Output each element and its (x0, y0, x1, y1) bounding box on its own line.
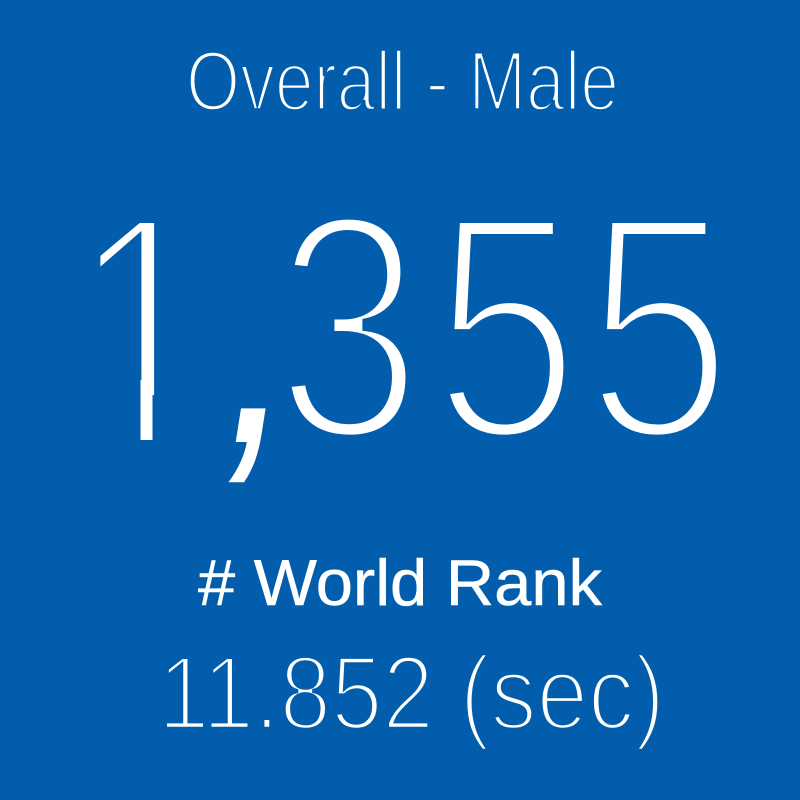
big number: , (224, 158, 296, 510)
big number: 1 (70, 147, 217, 507)
title: Overall - Male (186, 34, 619, 128)
big number: 5 (585, 147, 732, 507)
big number: 3 (276, 147, 422, 507)
big number (70, 147, 732, 510)
big number: 5 (433, 147, 580, 507)
time value: 11.852 (sec) (158, 635, 665, 752)
label: world rank: # World Rank (198, 546, 603, 619)
